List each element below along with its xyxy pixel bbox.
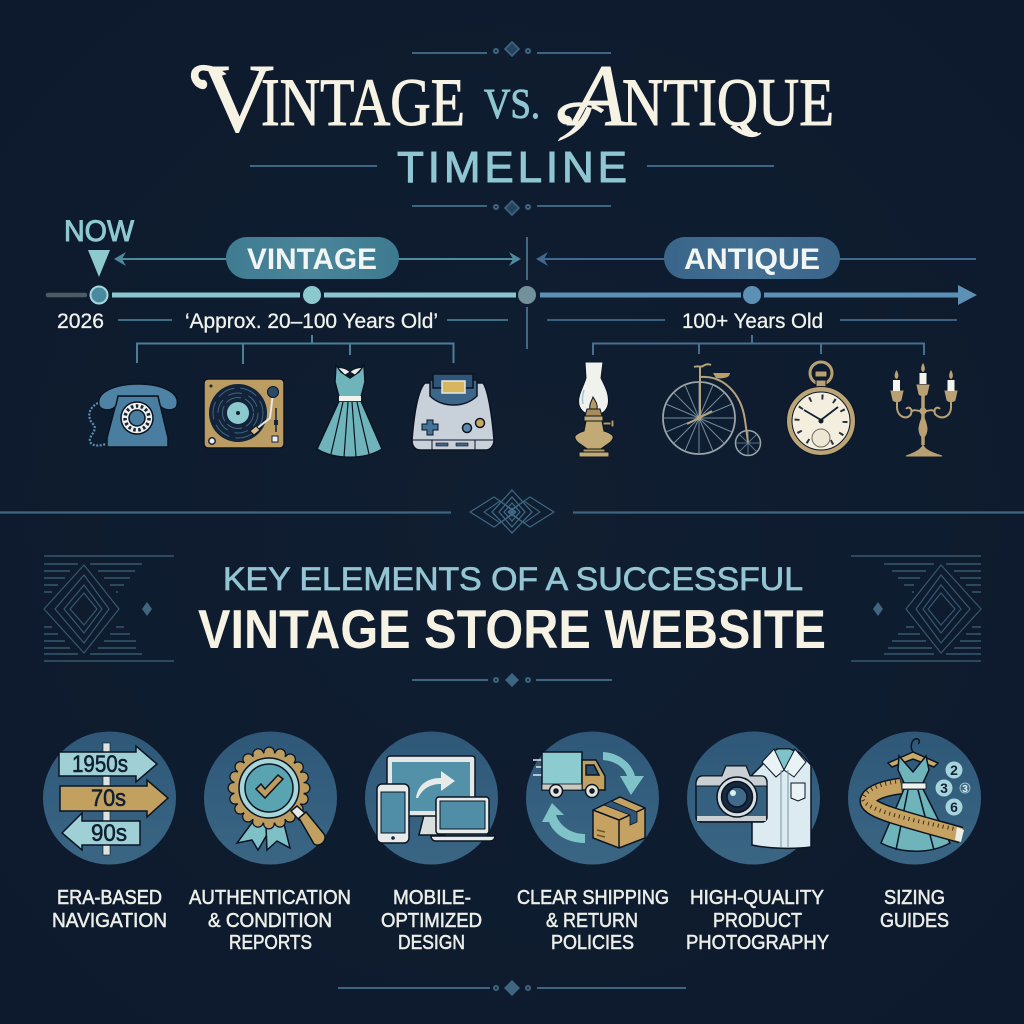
vintage age label: ‘Approx. 20–100 Years Old’ [185, 310, 438, 333]
label: sizing guides: SIZING [884, 887, 945, 909]
icon: signpost: 90s [91, 820, 127, 847]
icon: responsive devices [377, 756, 495, 843]
icon: pocket watch [786, 362, 856, 456]
icon: signpost: 70s [91, 785, 126, 812]
icon: dress, tape and size numbers: 6 [950, 799, 958, 815]
title word: Vintage: INTAGE [261, 64, 465, 140]
title word: Vintage [191, 45, 465, 153]
label: authentication: REPORTS [229, 932, 312, 954]
icon: seal and magnifier [234, 752, 325, 850]
antique pill: ANTIQUE [684, 243, 820, 276]
label: authentication [189, 887, 351, 954]
divider between eras [526, 237, 528, 349]
label: sizing guides: GUIDES [880, 910, 949, 932]
icon: dress, tape and size numbers [863, 739, 970, 851]
panel: shipping and returns [526, 732, 659, 864]
label: mobile-optimized design: MOBILE- [393, 887, 471, 909]
subtitle: timeline: TIMELINE [397, 143, 627, 192]
icon: record player [204, 379, 284, 448]
timeline axis [48, 285, 977, 305]
antique age label: 100+ Years Old [682, 310, 823, 333]
label: shipping and returns: CLEAR SHIPPING [517, 887, 669, 909]
section heading: KEY ELEMENTS OF A SUCCESSFUL [223, 561, 803, 597]
bottom ornament [338, 980, 686, 996]
vintage bracket [137, 335, 454, 364]
panel: era-based navigation [43, 732, 176, 864]
label: authentication: & CONDITION [208, 910, 332, 932]
icon: camera and shirt [696, 749, 811, 848]
heading ornament [412, 673, 612, 687]
label: product photography: PRODUCT [713, 910, 802, 932]
panel: mobile-optimized design [365, 732, 498, 864]
icon: candelabra [891, 363, 957, 456]
icon: truck, box and arrows [533, 752, 645, 848]
title word: Antique: NTIQUE [622, 64, 834, 140]
antique bracket [593, 335, 924, 355]
icon: signpost: 1950s [72, 751, 128, 778]
label: product photography [686, 887, 829, 954]
section divider with art-deco diamonds [0, 490, 1024, 533]
right art-deco ornament [851, 556, 981, 661]
icon: dress, tape and size numbers: 3 [940, 780, 948, 796]
icon: oil lamp [575, 362, 614, 457]
label: shipping and returns: POLICIES [551, 932, 634, 954]
title word: Antique: A [567, 48, 627, 145]
label: mobile-optimized design [381, 887, 482, 954]
label: era-based navigation: NAVIGATION [52, 910, 167, 932]
vintage range arrow [114, 252, 521, 266]
section heading [198, 561, 826, 660]
label: product photography: PHOTOGRAPHY [686, 932, 829, 954]
icon: rotary telephone [89, 384, 177, 447]
icon: game console [412, 374, 494, 450]
year label 2026: 2026 [57, 310, 104, 333]
label: era-based navigation: ERA-BASED [57, 887, 162, 909]
icon: signpost [59, 743, 168, 855]
icon: dress, tape and size numbers: 2 [950, 762, 958, 778]
label: mobile-optimized design: DESIGN [398, 932, 465, 954]
label: shipping and returns: & RETURN [546, 910, 638, 932]
label: authentication: AUTHENTICATION [189, 887, 351, 909]
top ornament [412, 42, 611, 56]
icon: dress, tape and size numbers: 3 [962, 784, 968, 795]
title word: Vintage: V [200, 45, 274, 153]
antique range arrow [536, 252, 976, 266]
label: mobile-optimized design: OPTIMIZED [381, 910, 482, 932]
title word: Antique [558, 48, 834, 145]
title word: vs.: VS. [484, 82, 540, 128]
title [191, 45, 834, 153]
label: product photography: HIGH-QUALITY [690, 887, 824, 909]
label: shipping and returns [517, 887, 669, 954]
antique pill [664, 237, 840, 279]
now marker: NOW [64, 215, 135, 248]
now marker [64, 215, 135, 277]
vintage pill: VINTAGE [247, 243, 377, 276]
left art-deco ornament [44, 556, 174, 661]
section heading: VINTAGE STORE WEBSITE [198, 598, 826, 660]
icon: penny-farthing bicycle [663, 364, 760, 456]
ornament under subtitle [412, 201, 611, 215]
panel: sizing guides [848, 732, 981, 864]
icon: vintage dress [317, 365, 382, 457]
panel: authentication [204, 732, 337, 864]
label: sizing guides [880, 887, 949, 932]
panel: product photography [687, 732, 820, 864]
label: era-based navigation [52, 887, 167, 932]
vintage pill [226, 237, 399, 279]
